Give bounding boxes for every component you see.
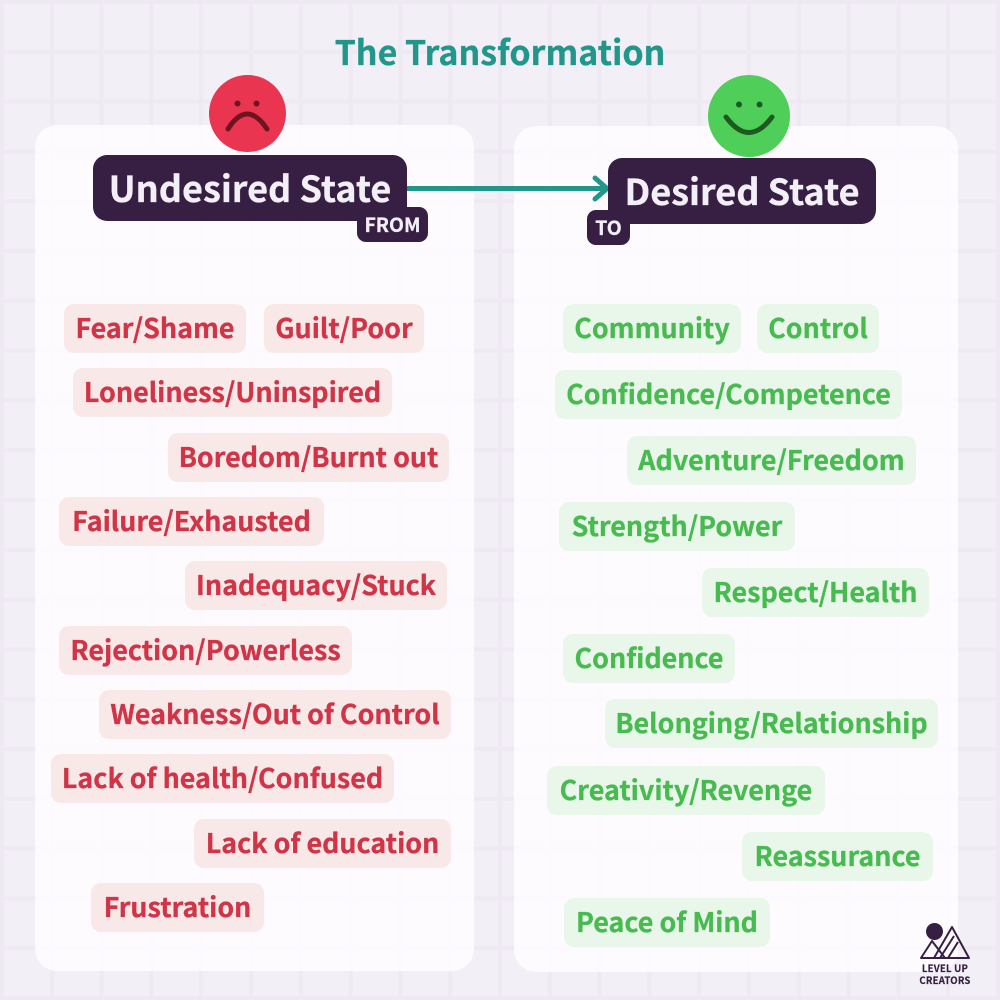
tag: confidence: Confidence (574, 637, 724, 676)
tag: reassurance: Reassurance (755, 835, 920, 874)
tag: guilt/poor (264, 304, 424, 353)
tag: peace of mind: Peace of Mind (576, 901, 758, 940)
tag: confidence/competence: Confidence/Competence (566, 373, 891, 412)
logo text: CREATORS (919, 973, 971, 987)
tag: community (563, 304, 741, 353)
tag: control (757, 304, 879, 353)
tag: inadequacy/stuck: Inadequacy/Stuck (196, 564, 436, 603)
tag: fear/shame: Fear/Shame (75, 307, 235, 346)
title: The Transformation (335, 26, 665, 75)
list: desired states (547, 304, 938, 947)
tag: belonging/relationship: Belonging/Relationship (615, 702, 928, 741)
tag: frustration (91, 883, 264, 932)
tag: loneliness/uninspired: Loneliness/Uninspired (84, 371, 381, 410)
tag: failure/exhausted: Failure/Exhausted (72, 500, 311, 539)
tag: confidence (563, 634, 735, 683)
tag: respect/health: Respect/Health (714, 571, 917, 610)
tag: lack of education: Lack of education (206, 822, 439, 861)
tag: reassurance (742, 832, 933, 881)
tag: lack of health/confused: Lack of health/Confused (62, 757, 383, 796)
tag: fear/shame (64, 304, 246, 353)
tag: boredom/burnt out: Boredom/Burnt out (179, 436, 438, 475)
logo: level up creators (919, 923, 971, 987)
list: undesired states (51, 304, 451, 932)
heading: desired state (608, 158, 876, 224)
tag: control: Control (768, 307, 868, 346)
tag: strength/power: Strength/Power (572, 505, 782, 544)
panel: desired state (514, 126, 958, 972)
panel: undesired state (35, 125, 474, 971)
heading: desired state: Desired State (624, 164, 860, 216)
tag: frustration: Frustration (104, 886, 251, 925)
icon: sad face (209, 75, 286, 152)
tag: creativity/revenge: Creativity/Revenge (560, 769, 812, 808)
tag: community: Community (574, 307, 730, 346)
tag: rejection/powerless: Rejection/Powerless (70, 629, 341, 668)
icon: mountains and sun (920, 923, 970, 959)
badge: to (587, 210, 630, 245)
tag: weakness/out of control: Weakness/Out of Control (110, 693, 440, 732)
badge: to: TO (595, 212, 622, 241)
badge: from (357, 207, 428, 242)
tag: adventure/freedom: Adventure/Freedom (638, 439, 905, 478)
tag: guilt/poor: Guilt/Poor (275, 307, 413, 346)
logo text (919, 961, 971, 987)
badge: from: FROM (364, 209, 421, 238)
logo text: LEVEL UP (922, 961, 968, 975)
icon: happy face (708, 75, 790, 157)
heading: undesired state: Undesired State (109, 161, 391, 213)
arrow: from undesired to desired (407, 176, 608, 202)
